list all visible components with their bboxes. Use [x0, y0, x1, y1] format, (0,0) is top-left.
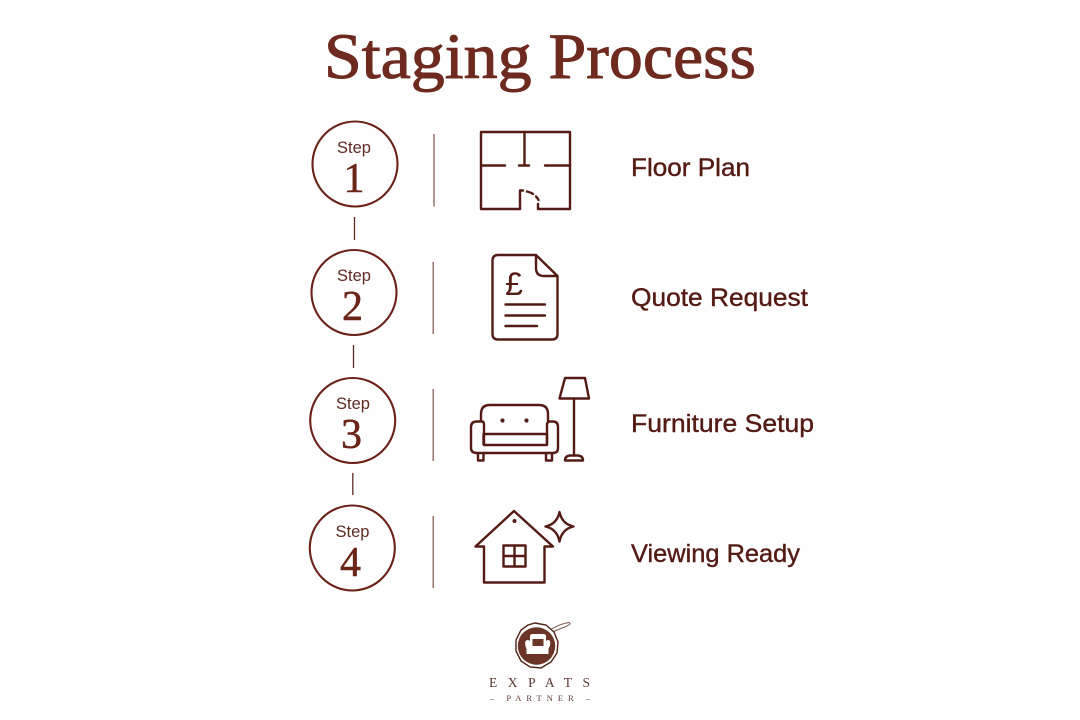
step 4 badge: 4 [340, 540, 361, 586]
logo: expats partner [489, 622, 591, 703]
icon: quote document: £ [505, 266, 523, 302]
label: viewing ready: Viewing Ready [631, 540, 801, 568]
icon: house with sparkle [476, 511, 574, 582]
label: quote request: Quote Request [631, 284, 808, 312]
connector 3 to 4 [352, 473, 354, 495]
step 3 badge: 3 [341, 412, 362, 458]
label: furniture setup: Furniture Setup [631, 410, 814, 438]
step 3 badge: Step [336, 395, 370, 413]
step 2 badge: Step [337, 267, 371, 285]
connector 1 to 2 [354, 217, 356, 240]
divider 4 [432, 516, 434, 588]
step 2 badge [312, 250, 396, 335]
step 1 badge [312, 122, 398, 206]
step 3 badge [310, 378, 395, 463]
icon: quote document [492, 255, 558, 340]
icon: floor plan [481, 132, 570, 209]
step 2 badge: 2 [342, 284, 363, 330]
logo wordmark: EXPATS [489, 675, 590, 690]
step 4 badge: Step [336, 523, 369, 541]
title: Staging Process [324, 21, 756, 93]
step 1 badge: 1 [344, 156, 364, 202]
logo medallion [516, 623, 558, 668]
label: floor plan: Floor Plan [631, 154, 750, 182]
connector 2 to 3 [352, 345, 354, 368]
logo tag string [545, 622, 570, 634]
step 4 badge [310, 506, 395, 590]
icon: sofa and floor lamp [471, 378, 589, 460]
logo subtitle: – PARTNER – [489, 693, 591, 703]
divider 1 [433, 134, 435, 206]
step 1 badge: Step [337, 139, 371, 157]
divider 2 [432, 262, 434, 334]
logo armchair [525, 634, 550, 654]
divider 3 [432, 389, 434, 461]
